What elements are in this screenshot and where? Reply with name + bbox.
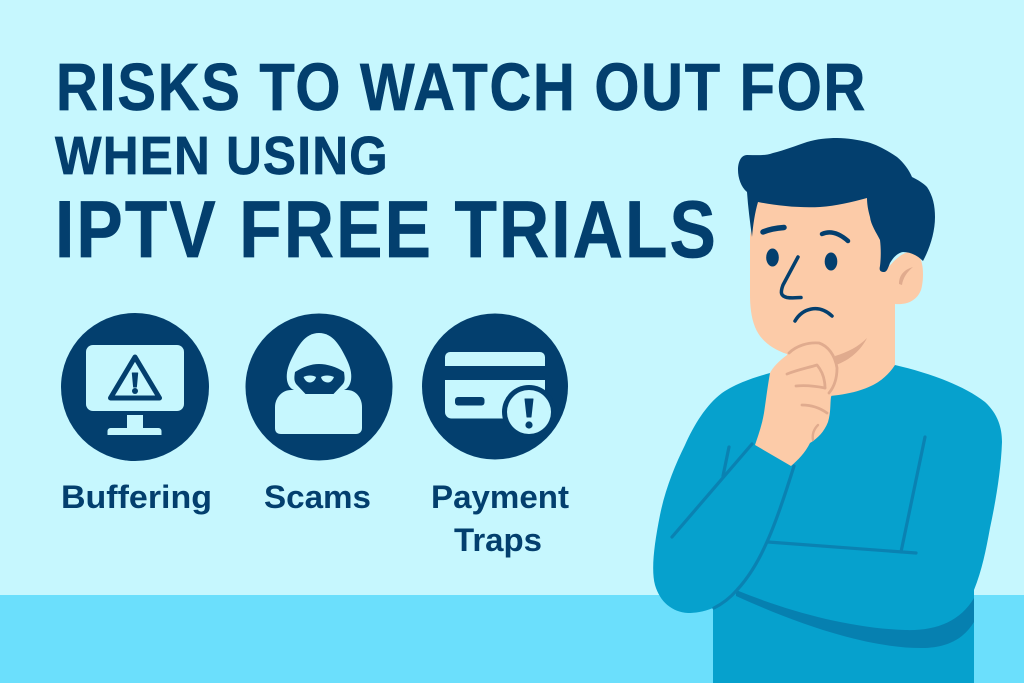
illustration: thinking man: [653, 138, 1002, 683]
jaw shadow: [835, 338, 867, 365]
face features: [763, 228, 848, 321]
ear: [885, 252, 923, 304]
label: Scams: Scams: [264, 479, 371, 515]
title: WHEN USING: [55, 126, 389, 186]
title: IPTV FREE TRIALS: [55, 185, 718, 275]
label: Payment Traps: [431, 479, 569, 558]
icon: scammer in hood: [246, 314, 392, 460]
icon: buffering monitor with warning: [61, 313, 209, 461]
label: Payment Traps: Traps: [454, 522, 542, 558]
hair: [738, 138, 935, 272]
sweater body: [653, 365, 1002, 683]
label: Payment Traps: Payment: [431, 479, 569, 515]
finger lines: [787, 343, 837, 440]
label: Buffering: Buffering: [61, 479, 212, 515]
hand: [755, 343, 837, 466]
sweater arm shadow: [736, 590, 974, 648]
title: [55, 50, 867, 275]
title: RISKS TO WATCH OUT FOR: [56, 50, 867, 125]
neck and face: [750, 196, 895, 396]
sweater fold lines: [672, 437, 925, 608]
icon: credit card with alert: [422, 314, 568, 460]
